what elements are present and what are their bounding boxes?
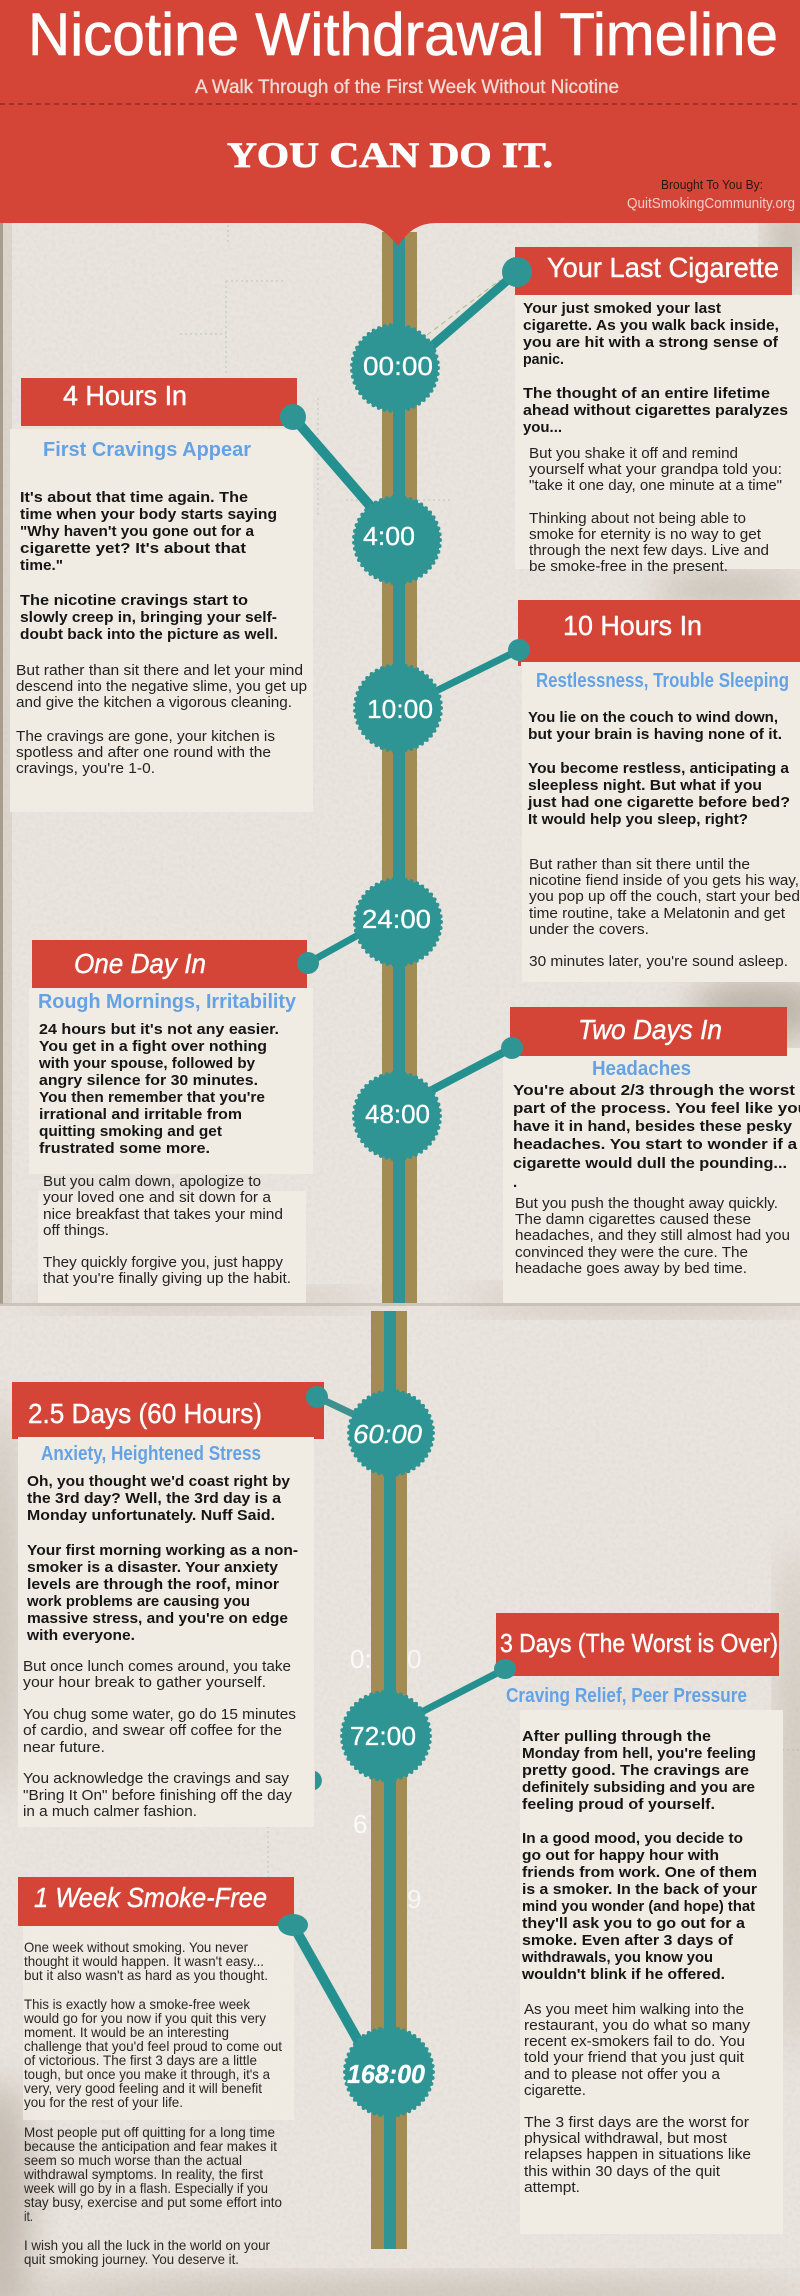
text: 10 hours regular: 30 minutes later, you're sound asleep. [529, 953, 788, 970]
text: one day bold: You then remember that you're [39, 1089, 265, 1106]
connector: 168:00 [278, 1914, 360, 2044]
text: last cigarette bold [523, 300, 788, 436]
slogan: YOU CAN DO IT. [227, 135, 553, 175]
badge: 168:00: 168:00 [347, 2059, 426, 2089]
text: 4 hours bold: time when your body starts saying [20, 506, 277, 523]
text: 1 week body: thought it would happen. It wasn't easy... [24, 1953, 264, 1969]
subheading: rough mornings: Rough Mornings, Irritability [38, 991, 297, 1013]
panel: 10 hours in [518, 600, 800, 982]
text: one day regular: that you're finally giving up the habit. [43, 1270, 291, 1287]
text: 2.5 days bold: with everyone. [26, 1627, 135, 1644]
text: 3 days bold: Monday from hell, you're feeling [522, 1745, 756, 1762]
text: last cigarette bold: you are hit with a strong sense of [523, 334, 779, 351]
badge: 00:00 [352, 325, 438, 411]
text: 1 week body: moment. It would be an interesting [24, 2024, 229, 2040]
text: 1 week body: stay busy, exercise and put some effort into [24, 2194, 282, 2210]
text: 2.5 days regular: "Bring It On" before finishing off the day [23, 1787, 293, 1804]
text: 4 hours regular: But rather than sit there and let your mind [16, 662, 303, 679]
text: 10 hours bold: but your brain is having none of it. [528, 726, 782, 743]
badge: 48:00 [354, 1073, 440, 1159]
text: 4 hours bold [20, 489, 278, 643]
text: 10 hours regular: under the covers. [529, 921, 649, 938]
text: one day regular: your loved one and sit down for a [43, 1189, 272, 1206]
panel: 3 days [496, 1613, 783, 2234]
text: 10 hours regular: nicotine fiend inside of you gets his way, [529, 872, 799, 889]
connector: 10:00 [432, 639, 530, 693]
text: 10 hours regular: you pop up off the couch, start your bed [529, 888, 800, 905]
badge: 24:00 [355, 879, 441, 965]
timeline: lower bar [371, 1311, 407, 2249]
text: 10 hours bold: just had one cigarette before bed? [527, 794, 790, 811]
connector: 72:00 [408, 1659, 516, 1719]
text: 1 week body: I wish you all the luck in the world on your [24, 2237, 270, 2253]
text: last cigarette regular [529, 445, 782, 575]
text: 4 hours bold: The nicotine cravings start to [20, 592, 248, 609]
subtitle: A Walk Through of the First Week Without Nicotine [195, 77, 619, 98]
credit label: Brought To You By: [661, 177, 763, 192]
text: 4 hours regular: cravings, you're 1-0. [16, 760, 155, 777]
text: 1 week body: you for the rest of your life. [24, 2094, 183, 2110]
text: 3 days bold: smoke. Even after 3 days of [522, 1932, 734, 1949]
text: 1 week body: challenge that you'd feel proud to come out [24, 2038, 282, 2054]
badge: 60:00 [349, 1391, 433, 1475]
text: two days bold [513, 1082, 800, 1191]
text: 4 hours bold: time." [20, 557, 63, 574]
text: 1 week body: seem so much worse than the actual [24, 2152, 242, 2168]
text: 3 days bold: is a smoker. In the back of your [522, 1881, 757, 1898]
heading: 4 hours in: 4 Hours In [63, 380, 187, 411]
text: one day regular: nice breakfast that takes your mind [43, 1206, 283, 1223]
subheading: headaches: Headaches [592, 1058, 691, 1080]
ghost numbers behind timeline: 6 [353, 1809, 367, 1839]
heading: two days in: Two Days In [578, 1014, 722, 1045]
text: 1 week body: week will go by in a flash. Especially if you [23, 2180, 268, 2196]
text: two days bold: You're about 2/3 through the worst [513, 1082, 795, 1099]
text: 4 hours regular [16, 662, 307, 777]
badge: 10:00 [355, 665, 441, 751]
text: one day regular: off things. [43, 1222, 109, 1239]
text: 3 days bold: After pulling through the [522, 1728, 711, 1745]
connector: half dot [315, 1771, 322, 1790]
text: 2.5 days bold: levels are through the roof, minor [27, 1576, 279, 1593]
text: 4 hours regular: The cravings are gone, your kitchen is [16, 728, 275, 745]
text: 3 days regular: this within 30 days of the quit [524, 2163, 721, 2180]
text: last cigarette regular: smoke for eternity is no way to get [529, 526, 762, 543]
heading: 1 week: 1 Week Smoke-Free [34, 1882, 267, 1913]
text: 3 days bold [521, 1728, 757, 1983]
text: 3 days bold: feeling proud of yourself. [522, 1796, 715, 1813]
badge: 72:00: 72:00 [350, 1721, 416, 1751]
text: 10 hours regular [529, 856, 800, 970]
text: 3 days bold: they'll ask you to go out for a [522, 1915, 746, 1932]
text: 3 days regular: and to please not offer you a [524, 2066, 721, 2083]
text: two days bold: have it in hand, besides these pesky [513, 1118, 793, 1135]
text: 2.5 days regular: You acknowledge the cravings and say [23, 1770, 290, 1787]
text: 2.5 days regular [23, 1658, 296, 1820]
text: 3 days regular: As you meet him walking into the [524, 2001, 744, 2018]
panel: one day in [29, 940, 313, 1303]
text: one day bold: You get in a fight over nothing [39, 1038, 267, 1055]
text: last cigarette bold: panic. [523, 351, 564, 368]
badge: 24:00: 24:00 [362, 904, 431, 934]
text: 4 hours bold: "Why haven't you gone out for a [20, 523, 255, 540]
heading: 10 hours in: 10 Hours In [563, 610, 702, 641]
text: 3 days regular: The 3 first days are the worst for [524, 2114, 749, 2131]
text: 1 week body: because the anticipation and fear makes it [24, 2138, 277, 2154]
connector: 24:00 [297, 934, 360, 974]
text: 10 hours bold [527, 709, 790, 828]
text: one day regular: They quickly forgive you, just happy [43, 1254, 283, 1271]
text: last cigarette regular: be smoke-free in the present. [529, 558, 728, 575]
text: last cigarette regular: Thinking about not being able to [529, 510, 746, 527]
text: last cigarette regular: "take it one day, one minute at a time" [529, 477, 782, 494]
text: two days bold: headaches. You start to wonder if a [513, 1136, 798, 1153]
text: 2.5 days bold: Your first morning working as a non- [27, 1542, 298, 1559]
text: 10 hours bold: You become restless, anticipating a [528, 760, 790, 777]
heading: one day in: One Day In [74, 948, 206, 979]
text: one day regular [43, 1173, 291, 1287]
text: 3 days bold: definitely subsiding and you are [522, 1779, 755, 1796]
text: two days bold: cigarette would dull the pounding... [513, 1155, 787, 1172]
text: 3 days bold: withdrawals, you know you [521, 1949, 713, 1966]
ghost numbers behind timeline: 9 [407, 1884, 421, 1914]
text: 1 week body: quit smoking journey. You deserve it. [24, 2251, 239, 2267]
text: 2.5 days bold: Monday unfortunately. Nuff Said. [27, 1507, 275, 1524]
text: 4 hours bold: slowly creep in, bringing your self- [20, 609, 277, 626]
text: 3 days regular: cigarette. [524, 2082, 586, 2099]
subheading: craving relief: Craving Relief, Peer Pressure [506, 1685, 747, 1707]
text: one day bold: with your spouse, followed by [38, 1055, 256, 1072]
badge: 60:00: 60:00 [353, 1419, 423, 1449]
text: 2.5 days regular: your hour break to gather yourself. [23, 1674, 266, 1691]
panel: 4 hours in [10, 378, 313, 812]
panel: your last cigarette [515, 247, 800, 575]
text: last cigarette bold: ahead without cigarettes paralyzes [523, 402, 788, 419]
text: 1 week body [23, 1939, 282, 2267]
text: 3 days bold: In a good mood, you decide to [522, 1830, 743, 1847]
badge: 48:00: 48:00 [365, 1099, 430, 1129]
text: one day regular: But you calm down, apologize to [43, 1173, 261, 1190]
badge: 00:00: 00:00 [363, 351, 433, 381]
panel: 1 week smoke-free [18, 1877, 294, 2267]
text: 4 hours regular: descend into the negative slime, you get up [16, 678, 307, 695]
text: 4 hours regular: spotless and after one round with the [16, 744, 271, 761]
text: last cigarette bold: Your just smoked your last [523, 300, 721, 317]
connector: 00:00 [425, 257, 532, 352]
text: 4 hours bold: doubt back into the picture as well. [20, 626, 278, 643]
text: 2.5 days bold: the 3rd day? Well, the 3rd day is a [27, 1490, 282, 1507]
text: two days bold: . [513, 1174, 517, 1191]
text: 10 hours regular: time routine, take a Melatonin and get [529, 905, 786, 922]
text: 3 days bold: friends from work. One of them [522, 1864, 757, 1881]
panel: two days in [503, 1007, 800, 1303]
header banner [0, 0, 800, 246]
text: 3 days regular: physical withdrawal, but most [524, 2130, 728, 2147]
text: 1 week body: would go for you now if you quit this very [23, 2010, 266, 2026]
text: 3 days bold: pretty good. The cravings are [522, 1762, 749, 1779]
badge: 10:00: 10:00 [367, 694, 433, 724]
text: two days regular [515, 1195, 790, 1277]
text: 1 week body: but it also wasn't as hard as you thought. [24, 1967, 268, 1983]
text: 2.5 days bold: smoker is a disaster. Your anxiety [27, 1559, 279, 1576]
text: last cigarette regular: But you shake it off and remind [529, 445, 738, 462]
ghost numbers behind timeline: 0: [350, 1644, 372, 1674]
text: 1 week body: withdrawal symptoms. In reality, the first [23, 2166, 263, 2182]
text: 3 days regular: told your friend that you just quit [524, 2049, 745, 2066]
text: 1 week body: very, very good feeling and it will benefit [24, 2080, 262, 2096]
text: 2.5 days regular: of cardio, and swear off coffee for the [23, 1722, 282, 1739]
title: Nicotine Withdrawal Timeline [28, 1, 778, 68]
text: one day bold: 24 hours but it's not any easier. [39, 1021, 279, 1038]
text: 2.5 days bold: Oh, you thought we'd coast right by [27, 1473, 291, 1490]
text: one day bold [38, 1021, 279, 1157]
text: one day bold: frustrated some more. [39, 1140, 210, 1157]
text: 2.5 days bold: massive stress, and you're on edge [27, 1610, 288, 1627]
text: 3 days bold: wouldn't blink if he offered. [521, 1966, 725, 1983]
text: last cigarette bold: cigarette. As you walk back inside, [523, 317, 779, 334]
subheading: anxiety: Anxiety, Heightened Stress [41, 1443, 261, 1465]
text: 2.5 days regular: But once lunch comes around, you take [23, 1658, 291, 1675]
text: two days regular: The damn cigarettes caused these [515, 1211, 751, 1228]
text: one day bold: angry silence for 30 minutes. [39, 1072, 258, 1089]
text: two days regular: But you push the thought away quickly. [515, 1195, 778, 1212]
text: 2.5 days bold [26, 1473, 298, 1644]
text: 3 days regular: attempt. [524, 2179, 580, 2196]
ghost numbers behind timeline: 0 [407, 1644, 421, 1674]
heading: 2.5 days: 2.5 Days (60 Hours) [28, 1398, 262, 1429]
text: 10 hours regular: But rather than sit there until the [529, 856, 750, 873]
text: 3 days bold: mind you wonder (and hope) that [522, 1898, 755, 1915]
connector: 4:00 [280, 404, 372, 508]
text: 3 days bold: go out for happy hour with [522, 1847, 719, 1864]
badge: 4:00: 4:00 [363, 521, 415, 551]
text: 2.5 days regular: in a much calmer fashion. [23, 1803, 197, 1820]
text: 1 week body: it. [24, 2208, 33, 2224]
text: 3 days regular [524, 2001, 751, 2196]
ghost numbers behind timeline [350, 1644, 421, 1914]
text: 1 week body: of victorious. The first 3 days are a little [24, 2052, 257, 2068]
text: last cigarette regular: yourself what your grandpa told you: [529, 461, 782, 478]
heading: last cigarette: Your Last Cigarette [547, 252, 779, 283]
text: one day bold: quitting smoking and get [39, 1123, 222, 1140]
text: 10 hours bold: You lie on the couch to wind down, [528, 709, 778, 726]
badge: 72:00 [342, 1692, 430, 1780]
text: 2.5 days regular: near future. [23, 1739, 105, 1756]
text: 2.5 days bold: work problems are causing you [26, 1593, 250, 1610]
text: last cigarette bold: The thought of an entire lifetime [523, 385, 770, 402]
text: 4 hours bold: It's about that time again. The [20, 489, 248, 506]
text: two days regular: convinced they were the cure. The [515, 1244, 748, 1261]
text: last cigarette bold: you... [523, 419, 562, 436]
text: 1 week body: One week without smoking. You never [24, 1939, 248, 1955]
text: 2.5 days regular: You chug some water, go do 15 minutes [23, 1706, 296, 1723]
badge: 168:00 [345, 2028, 433, 2116]
text: one day bold: irrational and irritable from [39, 1106, 242, 1123]
text: 1 week body: Most people put off quitting for a long time [24, 2124, 275, 2140]
connector: 48:00 [428, 1037, 523, 1092]
timeline: upper bar [382, 232, 417, 1303]
text: 3 days regular: restaurant, you do what so many [524, 2017, 751, 2034]
text: 3 days regular: relapses happen in situations like [524, 2146, 751, 2163]
text: two days regular: headache goes away by bed time. [515, 1260, 747, 1277]
connector: 60:00 [306, 1386, 355, 1415]
text: two days regular: headaches, and they still almost had you [515, 1227, 790, 1244]
subheading: first cravings: First Cravings Appear [43, 439, 251, 461]
text: 3 days regular: recent ex-smokers fail to do. You [524, 2033, 745, 2050]
text: 10 hours bold: sleepless night. But what if you [528, 777, 762, 794]
text: two days bold: part of the process. You feel like you [513, 1100, 800, 1117]
text: 1 week body: tough, but once you make it through, it's a [24, 2066, 270, 2082]
text: last cigarette regular: through the next few days. Live and [529, 542, 769, 559]
text: 10 hours bold: It would help you sleep, right? [528, 811, 748, 828]
text: 4 hours regular: and give the kitchen a vigorous cleaning. [16, 694, 292, 711]
badge: 4:00 [354, 497, 440, 583]
text: 1 week body: This is exactly how a smoke-free week [24, 1996, 251, 2012]
text: 4 hours bold: cigarette yet? It's about that [20, 540, 246, 557]
panel: 2.5 days [12, 1382, 324, 1827]
